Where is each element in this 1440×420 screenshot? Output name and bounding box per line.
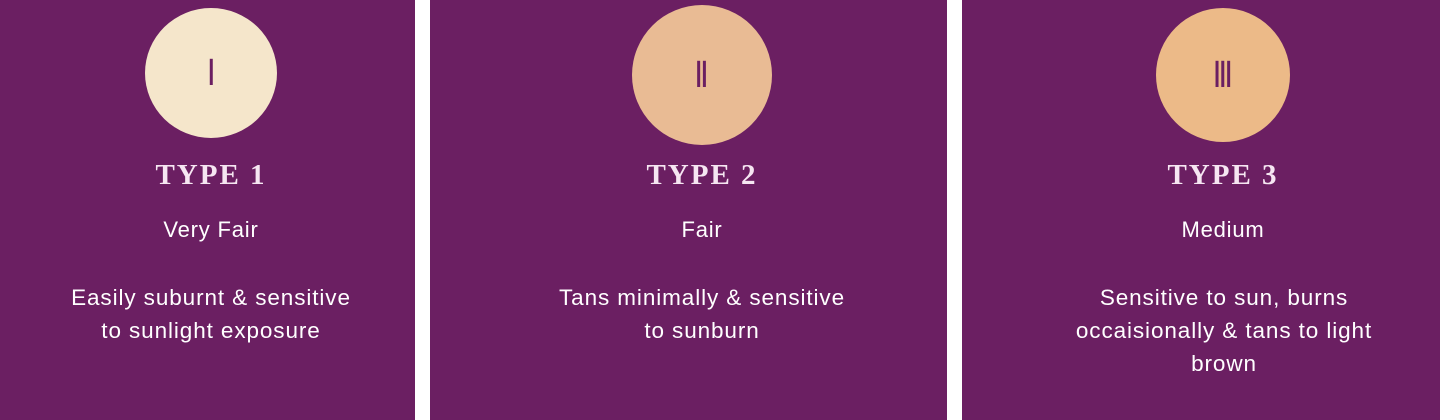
description: [1076, 285, 1372, 376]
description: [71, 285, 351, 343]
subheading: Medium: [1181, 217, 1265, 242]
description: Easily suburnt & sensitive: [71, 285, 351, 310]
subheading: Fair: [681, 217, 723, 242]
description: to sunlight exposure: [101, 318, 321, 343]
description: occaisionally & tans to light: [1076, 318, 1372, 343]
heading: type 2: TYPE 2: [646, 159, 758, 191]
subheading: Very Fair: [163, 217, 259, 242]
heading: type 3: TYPE 3: [1167, 159, 1279, 191]
icon: circle III: [1156, 8, 1290, 142]
icon: circle I: [145, 8, 277, 138]
panel: type 1: [0, 0, 415, 420]
icon: circle III: III: [1214, 54, 1232, 96]
description: brown: [1191, 351, 1257, 376]
icon: circle I: I: [208, 52, 214, 94]
description: Tans minimally & sensitive: [559, 285, 845, 310]
icon: circle II: II: [696, 54, 708, 96]
description: Sensitive to sun, burns: [1100, 285, 1348, 310]
panel: type 2: [430, 0, 947, 420]
icon: circle II: [632, 5, 772, 145]
panel: type 3: [962, 0, 1440, 420]
description: [559, 285, 845, 343]
heading: type 1: TYPE 1: [155, 159, 267, 191]
description: to sunburn: [644, 318, 760, 343]
